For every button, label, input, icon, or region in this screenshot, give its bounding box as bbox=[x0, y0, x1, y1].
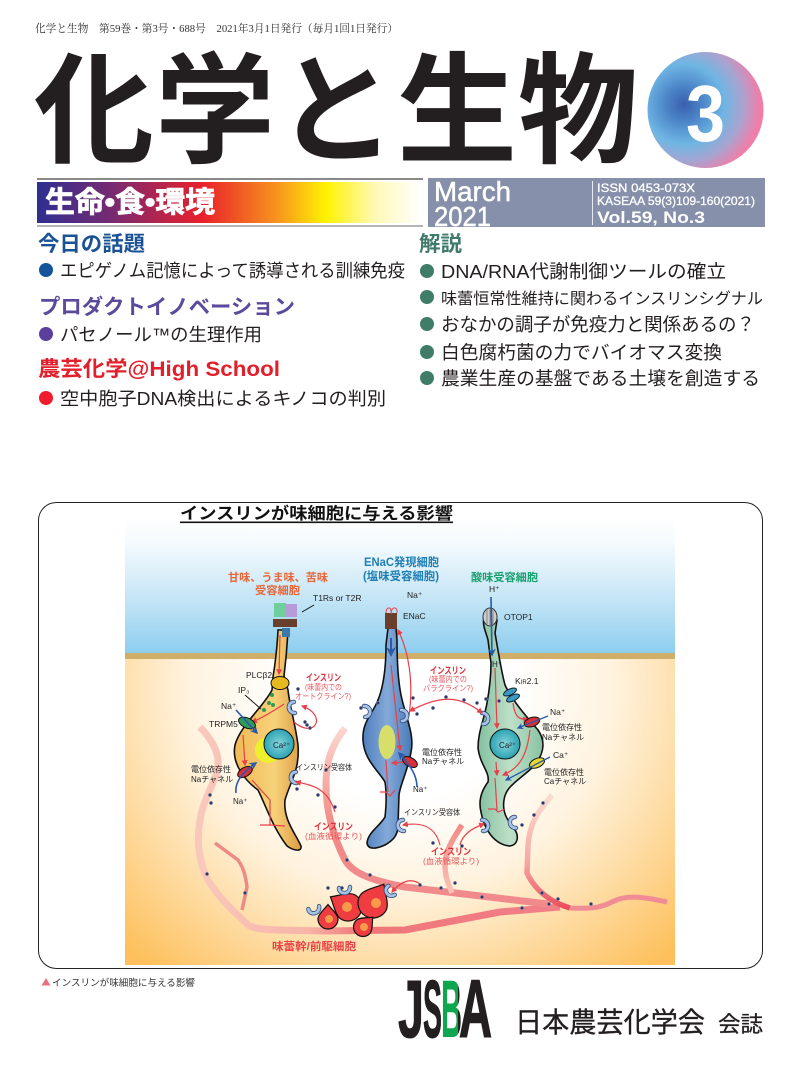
heading: today's topic: 今日の話題 bbox=[38, 233, 145, 256]
cell: sweet umami bitter receptor: Ca²⁺ bbox=[273, 741, 290, 750]
item 1: DNA/RNA代謝制御ツールの確立 bbox=[441, 261, 726, 282]
society logo: B bbox=[441, 964, 462, 1055]
labels: sour cell: H⁺ bbox=[489, 584, 500, 594]
figure caption: インスリンが味細胞に与える影響 bbox=[52, 977, 195, 989]
issue info box bbox=[428, 176, 765, 232]
issue info box: 2021 bbox=[434, 201, 491, 232]
labels: ENaC cell: Na⁺ bbox=[413, 785, 427, 794]
item 5: 農業生産の基盤である土壌を創造する bbox=[441, 368, 760, 389]
issue info box: KASEAA 59(3)109-160(2021) bbox=[597, 194, 755, 208]
cell: sour receptor bbox=[478, 597, 550, 846]
labels: sweet umami bitter cell: Na⁺ bbox=[233, 797, 247, 806]
labels: sweet umami bitter cell: TRPM5 bbox=[209, 719, 238, 729]
right contents column bbox=[419, 233, 763, 389]
tagline band bbox=[37, 178, 423, 227]
label: stem cells: 味蕾幹/前駆細胞 bbox=[272, 939, 356, 953]
publication line: 化学と生物 第59巻・第3号・688号 2021年3月1日発行（毎月1回1日発行） bbox=[35, 21, 398, 35]
society logo: J bbox=[398, 964, 424, 1055]
society name: 会誌 bbox=[718, 1012, 763, 1037]
insulin dots bbox=[205, 687, 593, 910]
issue info box: Vol.59, No.3 bbox=[597, 209, 705, 227]
issue info box: March bbox=[434, 176, 511, 207]
labels: sour cell: Ca²⁺ bbox=[499, 741, 516, 750]
labels: insulin routes: (血液循環より) bbox=[423, 856, 479, 866]
labels: sour cell: H⁺ bbox=[492, 660, 502, 669]
issue number badge: 3 bbox=[686, 69, 725, 158]
labels: ENaC cell: インスリン受容体 bbox=[404, 807, 460, 817]
labels: sweet umami bitter cell: T1Rs or T2R bbox=[313, 593, 362, 603]
item 2: 味蕾恒常性維持に関わるインスリンシグナル bbox=[441, 290, 763, 308]
left contents column bbox=[38, 233, 405, 409]
labels: sour cell: 電位依存性 bbox=[542, 722, 582, 732]
labels: sweet umami bitter cell: 電位依存性 bbox=[191, 764, 231, 774]
labels: insulin routes: (味蕾内での bbox=[429, 674, 467, 684]
labels: insulin routes: インスリン bbox=[314, 822, 353, 833]
labels: sweet umami bitter cell: Na⁺ bbox=[221, 701, 237, 711]
labels: sweet umami bitter cell: IP₃ bbox=[238, 685, 250, 695]
item 4: 白色腐朽菌の力でバイオマス変換 bbox=[441, 342, 722, 363]
title: 化学と生物 bbox=[34, 45, 639, 179]
item: mushroom: 空中胞子DNA検出によるキノコの判別 bbox=[60, 389, 386, 409]
heading: high school: 農芸化学@High School bbox=[38, 358, 280, 381]
labels: sweet umami bitter cell bbox=[191, 570, 362, 806]
labels: sour cell: Na⁺ bbox=[550, 707, 566, 717]
tagline band: 生命•食•環境 bbox=[45, 186, 215, 219]
labels: sweet umami bitter cell: 甘味、うま味、苦味 bbox=[228, 570, 328, 584]
labels: ENaC cell: (塩味受容細胞) bbox=[363, 569, 439, 583]
insulin receptors bbox=[289, 702, 516, 831]
labels: ENaC cell: ENaC bbox=[403, 611, 426, 621]
labels: ENaC cell: ENaC発現細胞 bbox=[364, 555, 439, 569]
labels: sweet umami bitter cell: Naチャネル bbox=[191, 775, 233, 784]
blood vessels bbox=[198, 727, 667, 931]
heading: commentary: 解説 bbox=[419, 233, 462, 256]
labels: sour cell: Caチャネル bbox=[544, 777, 586, 786]
labels: ENaC cell: Na⁺ bbox=[407, 590, 423, 600]
cell: sweet umami bitter receptor bbox=[234, 603, 301, 850]
labels: insulin routes: オートクライン?) bbox=[295, 692, 351, 701]
labels: insulin routes: インスリン bbox=[430, 666, 466, 677]
background: sky layer bbox=[125, 518, 675, 654]
labels: insulin routes: (血液循環より) bbox=[305, 831, 362, 841]
labels: sour cell: KIR2.1 bbox=[515, 676, 539, 686]
labels: sour cell bbox=[471, 570, 586, 786]
labels: insulin routes: (味蕾内での bbox=[305, 682, 342, 692]
labels: sweet umami bitter cell: 受容細胞 bbox=[255, 583, 300, 597]
insulin arrows bbox=[294, 699, 484, 892]
issue number badge bbox=[648, 52, 764, 168]
figure frame bbox=[38, 502, 762, 968]
labels: sweet umami bitter cell: インスリン受容体 bbox=[296, 762, 352, 772]
labels: sour cell: Ca⁺ bbox=[553, 750, 569, 760]
figure heading: インスリンが味細胞に与える影響 bbox=[180, 503, 453, 523]
labels: insulin routes: インスリン bbox=[306, 673, 341, 684]
labels: ENaC cell bbox=[363, 555, 464, 817]
society logo bbox=[398, 964, 492, 1055]
labels: sour cell: OTOP1 bbox=[504, 612, 533, 622]
labels: sour cell: 酸味受容細胞 bbox=[471, 570, 538, 584]
labels: insulin routes bbox=[295, 666, 479, 866]
labels: sour cell: Naチャネル bbox=[542, 733, 584, 742]
background: tissue layer bbox=[125, 658, 675, 965]
society logo: S bbox=[423, 964, 442, 1055]
issue info box: ISSN 0453-073X bbox=[597, 181, 695, 195]
item: epigenome: エピゲノム記憶によって誘導される訓練免疫 bbox=[60, 261, 405, 281]
item 3: おなかの調子が免疫力と関係あるの？ bbox=[441, 314, 755, 335]
cluster: taste stem and progenitor cells bbox=[308, 877, 397, 940]
cell: ENaC salt receptor bbox=[363, 608, 419, 848]
heading: product innovation: プロダクトイノベーション bbox=[39, 295, 295, 319]
society logo: A bbox=[459, 964, 492, 1055]
figure: insulin and taste cells bbox=[125, 503, 675, 965]
labels: ENaC cell: 電位依存性 bbox=[422, 747, 462, 757]
labels: sour cell: 電位依存性 bbox=[544, 767, 584, 777]
labels: insulin routes: インスリン bbox=[431, 847, 471, 858]
labels: sweet umami bitter cell: PLCβ2 bbox=[246, 670, 272, 680]
item: pasenol: パセノール™の生理作用 bbox=[60, 325, 262, 345]
society name: 日本農芸化学会 bbox=[515, 1007, 705, 1038]
labels: insulin routes: パラクライン?) bbox=[423, 684, 473, 693]
labels: ENaC cell: Naチャネル bbox=[422, 757, 464, 766]
